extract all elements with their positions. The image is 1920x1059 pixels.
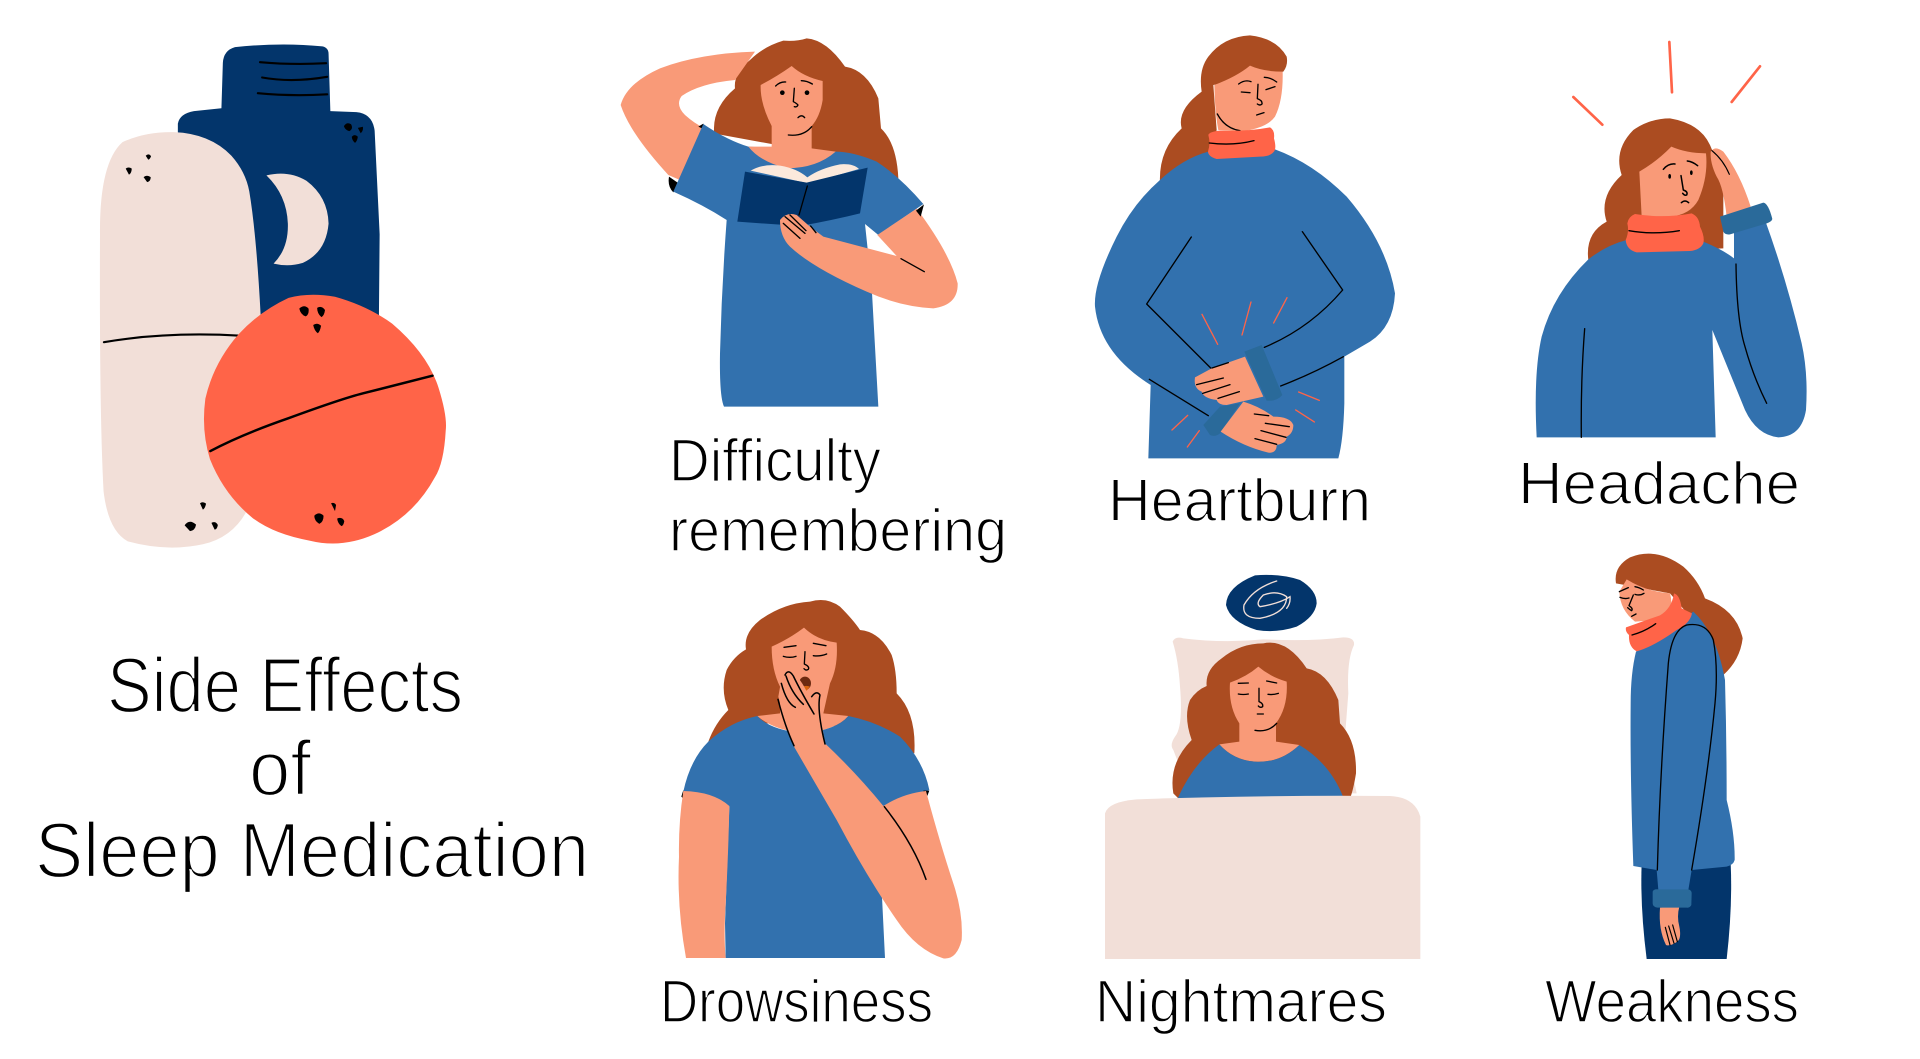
sleeve shadow [669,124,705,192]
hair [1172,643,1356,798]
label: difficulty remembering: remembering [669,497,1007,564]
round tablet [204,295,446,543]
left arm [679,791,729,958]
sweater [1095,149,1395,458]
neck [748,110,836,168]
title [35,641,589,894]
face [761,66,823,126]
facial features [783,643,827,691]
reading arm and hand [780,204,958,308]
title: of [249,724,311,812]
pain rays [1172,298,1319,447]
illustration: sleep medication bottle and pills [100,44,446,548]
medicine bottle [178,44,380,320]
figure: nightmares [1105,575,1420,959]
facial features [776,81,812,135]
face [1214,66,1283,132]
raised hand [1711,148,1751,217]
garment lines [1581,231,1767,437]
title: Sleep Medication [35,806,589,894]
title: Side Effects [107,641,463,729]
facial features [1663,161,1698,203]
face [1639,147,1706,217]
sleeve cuff [1653,889,1692,908]
label: drowsiness: Drowsiness [660,968,933,1035]
hair [1588,118,1723,260]
sleeve shadow [681,790,929,799]
shirt [1178,744,1343,798]
hair [713,38,898,178]
label: weakness: Weakness [1545,968,1799,1035]
pillow [1172,637,1357,793]
neck and face [1219,667,1299,762]
arm outlines [1147,141,1343,416]
garment lines [1632,624,1716,870]
neck and face [757,628,848,733]
label: difficulty remembering [669,427,1007,564]
trousers [1641,863,1731,959]
label: nightmares: Nightmares [1095,968,1387,1035]
lower cuff and hand [1203,402,1293,453]
book [737,164,868,226]
sweater [1536,220,1807,437]
blanket [1105,796,1420,959]
label: difficulty remembering: Difficulty [669,427,881,494]
t-shirt [683,716,929,958]
hair [1160,35,1287,183]
pain rays [1573,42,1760,125]
figure: drowsiness [679,600,962,958]
label: heartburn: Heartburn [1108,467,1371,534]
hand [1660,907,1680,945]
figure: heartburn [1095,35,1395,458]
scarf [1626,213,1704,252]
hair [708,600,915,753]
sleeve cuff [1720,203,1772,234]
label: headache: Headache [1518,450,1800,517]
scarf [1208,127,1275,159]
sweater [1631,612,1735,890]
scarf [1626,593,1692,651]
face [1619,579,1671,622]
facial features [1217,77,1277,131]
facial features [1619,587,1644,616]
figure: difficulty remembering [621,38,958,407]
hair [1616,554,1743,675]
facial features [1238,681,1278,731]
figure: weakness [1616,554,1743,959]
capsule pill [100,132,261,548]
raised arm [621,52,755,180]
shirt [673,124,923,407]
yawning arm and hand [778,672,962,958]
upper cuff and hand [1195,345,1282,405]
figure: headache [1536,42,1807,437]
dream bubble [1226,575,1317,631]
